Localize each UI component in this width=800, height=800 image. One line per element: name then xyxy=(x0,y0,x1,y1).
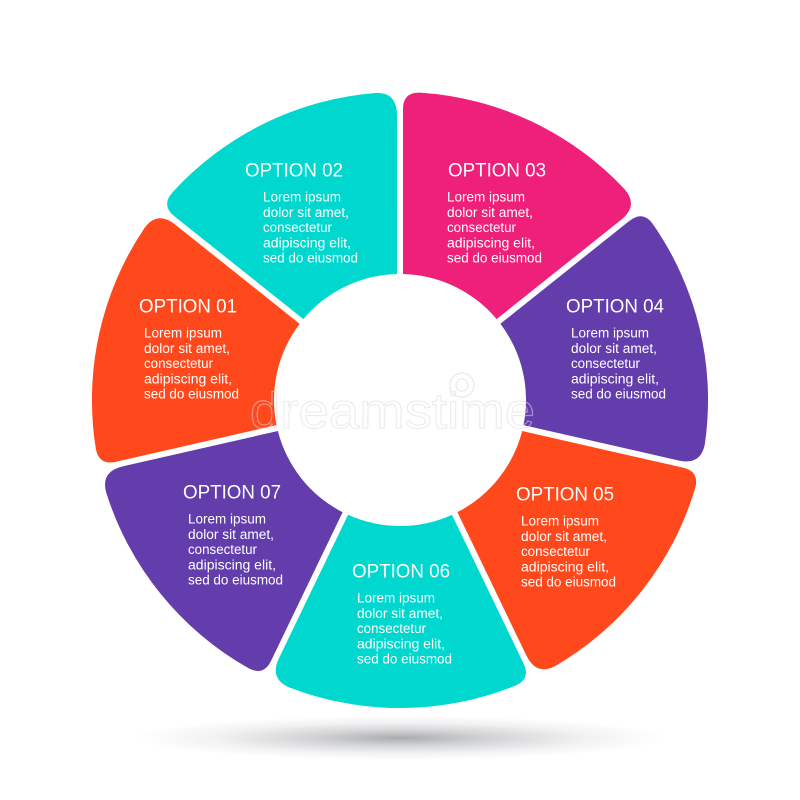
text: option 06: dolor sit amet, xyxy=(357,606,443,621)
text: option 06: consectetur xyxy=(357,621,427,636)
text: option 06: adipiscing elit, xyxy=(357,636,445,652)
text: option 02: consectetur xyxy=(263,220,333,235)
segment: option 07 xyxy=(59,373,362,676)
text: option 04: adipiscing elit, xyxy=(571,372,659,386)
text: option 05: Lorem ipsum xyxy=(521,514,599,528)
text: option 02: dolor sit amet, xyxy=(263,205,349,220)
text: option 04: sed do eiusmod xyxy=(571,386,666,402)
text: option 03: adipiscing elit, xyxy=(447,236,535,250)
text: option 05: dolor sit amet, xyxy=(521,529,607,544)
text: option 03: dolor sit amet, xyxy=(447,205,533,220)
text: option 06 xyxy=(352,562,452,666)
text: option 02: adipiscing elit, xyxy=(263,236,351,250)
segment: option 05 xyxy=(427,421,699,694)
text: option 01 xyxy=(139,296,239,402)
text: option 06: sed do eiusmod xyxy=(357,652,452,666)
text: option 05 xyxy=(516,484,616,590)
text: option 02: Lorem ipsum xyxy=(263,190,341,204)
segment: option 06 xyxy=(227,474,531,777)
text: option 07: adipiscing elit, xyxy=(188,558,276,572)
text: option 01: sed do eiusmod xyxy=(144,386,239,402)
text: option 07 xyxy=(183,482,283,588)
text: option 06: OPTION 06 xyxy=(352,562,450,582)
text: option 02: sed do eiusmod xyxy=(263,250,358,266)
text: option 07: Lorem ipsum xyxy=(188,512,266,526)
segment: option 01 xyxy=(49,193,320,465)
text: option 02: OPTION 02 xyxy=(245,160,343,182)
text: option 01: consectetur xyxy=(144,356,214,371)
text: option 04 xyxy=(566,296,666,402)
ground shadow xyxy=(135,716,665,760)
text: option 07: OPTION 07 xyxy=(183,482,281,504)
watermark: dreamstime xyxy=(250,383,535,439)
text: option 07: sed do eiusmod xyxy=(188,572,283,588)
text: option 06: Lorem ipsum xyxy=(357,590,435,606)
text: option 05: consectetur xyxy=(521,544,591,559)
segment: option 02 xyxy=(162,28,481,347)
text: option 05: sed do eiusmod xyxy=(521,574,616,590)
text: option 02 xyxy=(245,160,358,266)
text: option 03: OPTION 03 xyxy=(448,160,546,182)
text: option 07: consectetur xyxy=(188,542,258,557)
text: option 04: Lorem ipsum xyxy=(571,326,649,340)
text: option 03: Lorem ipsum xyxy=(447,190,525,204)
text: option 05: adipiscing elit, xyxy=(521,560,609,574)
text: option 01: adipiscing elit, xyxy=(144,372,232,386)
text: option 04: consectetur xyxy=(571,356,641,371)
text: option 01: OPTION 01 xyxy=(139,296,237,318)
text: option 03 xyxy=(447,160,546,266)
text: option 03: consectetur xyxy=(447,220,517,235)
segment: option 03 xyxy=(403,93,631,319)
text: option 01: dolor sit amet, xyxy=(144,341,230,356)
segment: option 04 xyxy=(465,211,784,530)
text: option 03: sed do eiusmod xyxy=(447,250,542,266)
text: option 07: dolor sit amet, xyxy=(188,527,274,542)
text: option 04: OPTION 04 xyxy=(566,296,664,318)
text: option 01: Lorem ipsum xyxy=(144,326,222,340)
text: option 05: OPTION 05 xyxy=(516,484,614,506)
text: option 04: dolor sit amet, xyxy=(571,341,657,356)
